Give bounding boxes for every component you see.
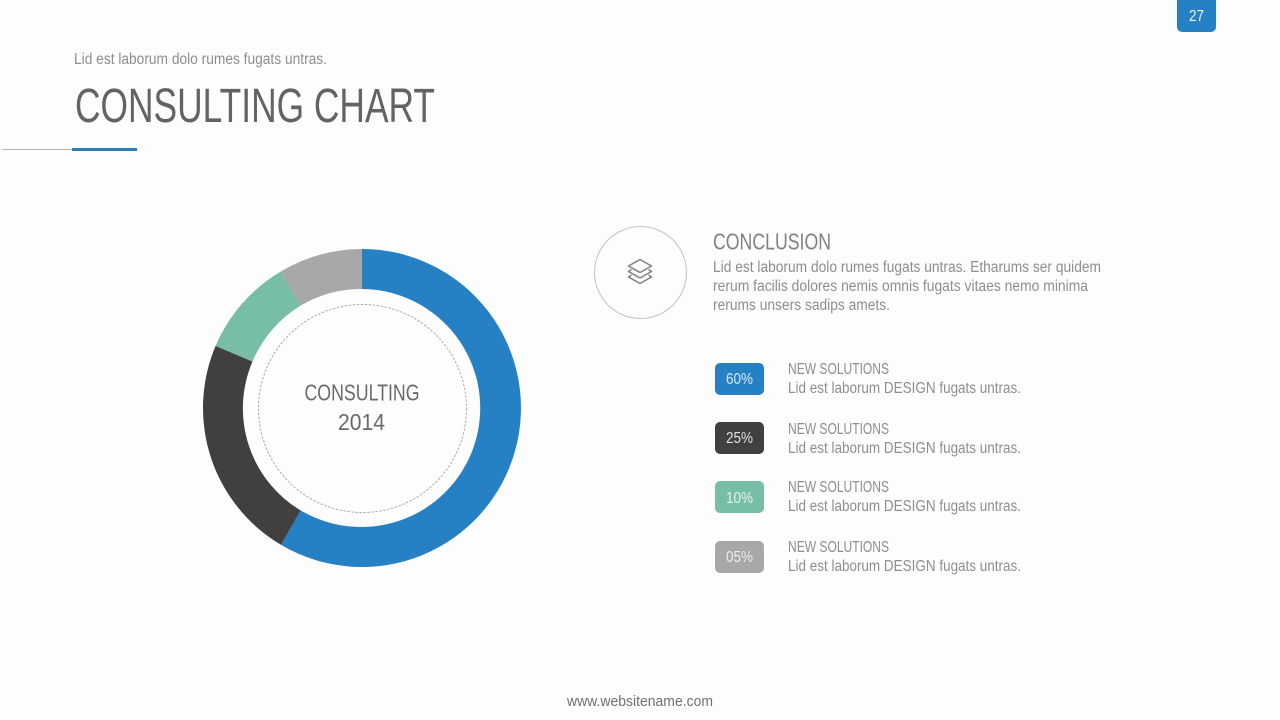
legend row: 25%: 25%	[726, 430, 753, 447]
title: CONSULTING CHART	[75, 80, 435, 133]
page number badge	[1177, 0, 1216, 32]
footer website: www.websitename.com	[566, 693, 713, 710]
donut chart	[203, 249, 521, 567]
segment: green 10%	[216, 272, 301, 362]
legend row: 60%	[715, 361, 1021, 397]
legend row: 05%: 05%	[726, 549, 753, 566]
chart center label	[304, 380, 420, 435]
legend row: 10%	[715, 479, 1021, 515]
legend row: 05%: Lid est laborum DESIGN fugats untras.	[788, 558, 1021, 575]
segment: gray 5%	[281, 249, 362, 305]
subtitle: Lid est laborum dolo rumes fugats untras.	[74, 51, 327, 68]
conclusion text	[713, 259, 1101, 314]
title underline	[2, 148, 137, 151]
legend row: 60%: 60%	[726, 371, 753, 388]
legend row: 25%: Lid est laborum DESIGN fugats untras.	[788, 440, 1021, 457]
legend row: 25%: NEW SOLUTIONS	[788, 421, 889, 438]
segment: dark 25%	[203, 346, 301, 545]
conclusion heading: CONCLUSION	[713, 228, 831, 254]
legend row: 10%: 10%	[726, 490, 753, 507]
legend row: 60%: Lid est laborum DESIGN fugats untras.	[788, 380, 1021, 397]
conclusion text: rerums unsers sadips amets.	[713, 297, 890, 314]
dashed inner ring	[258, 304, 466, 512]
chart center label: CONSULTING	[304, 380, 420, 406]
chart center label: 2014	[338, 409, 385, 435]
legend row: 10%: NEW SOLUTIONS	[788, 479, 889, 496]
page number badge: 27	[1189, 8, 1204, 25]
segment: blue 60%	[281, 249, 521, 567]
conclusion text: rerum facilis dolores nemis omnis fugats vitaes nemo minima	[713, 278, 1088, 295]
legend row: 10%: Lid est laborum DESIGN fugats untras.	[788, 498, 1021, 515]
legend row: 05%	[715, 539, 1021, 575]
legend row: 25%	[715, 421, 1021, 457]
legend row: 05%: NEW SOLUTIONS	[788, 539, 889, 556]
conclusion text: Lid est laborum dolo rumes fugats untras. Etharums ser quidem	[713, 259, 1101, 276]
legend row: 60%: NEW SOLUTIONS	[788, 361, 889, 378]
icon: layers in circle	[594, 226, 686, 318]
